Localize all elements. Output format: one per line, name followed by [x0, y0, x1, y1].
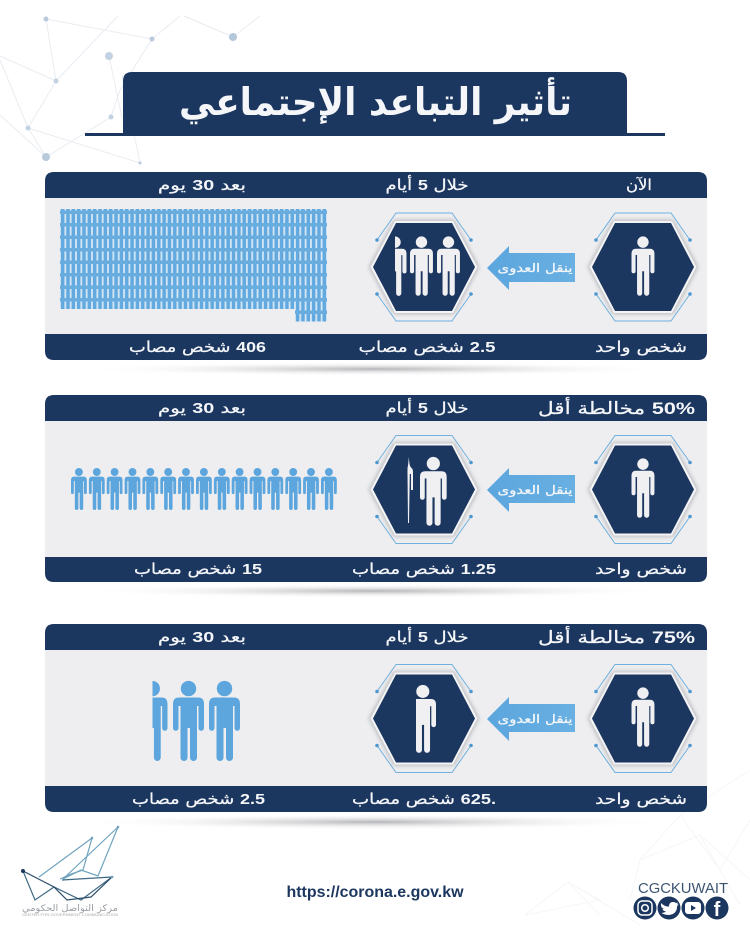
icon: one person hexagon — [588, 213, 698, 321]
panel: 50% less contact — [45, 395, 707, 582]
header bar — [45, 395, 707, 421]
label: one person: شخص واحد — [595, 560, 687, 578]
label: 406 infected: 406 شخص مصاب — [129, 338, 266, 356]
heading: now: الآن — [626, 176, 652, 194]
shadow under panel — [75, 584, 675, 598]
logo arabic name: مركز التواصل الحكومي — [22, 904, 118, 914]
panel body — [45, 395, 707, 582]
icon: 0.625 person hexagon — [369, 664, 479, 772]
chart: 2.5 people — [138, 681, 240, 761]
footer bar — [45, 334, 707, 360]
shadow under panel — [75, 362, 675, 376]
footer bar — [45, 557, 707, 582]
shadow under panel — [75, 814, 675, 830]
header bar — [45, 172, 707, 198]
arrow: transmits infection — [487, 468, 575, 512]
heading: within 5 days: خلال 5 أيام — [386, 175, 468, 194]
heading: after 30 days: بعد 30 يوم — [158, 176, 246, 194]
panel body — [45, 624, 707, 812]
title banner — [85, 72, 665, 136]
label: 1.25 infected: 1.25 شخص مصاب — [352, 560, 496, 578]
label: 2.5 infected: 2.5 شخص مصاب — [358, 338, 496, 356]
icon: one person hexagon — [588, 436, 698, 544]
social handle: CGCKUWAIT — [638, 880, 728, 897]
logo english name: CENTER FOR GOVERNMENT COMMUNICATION — [22, 912, 118, 917]
background network bottom-right — [525, 770, 750, 925]
panel: 75% less contact — [45, 624, 707, 812]
icon: 1.25 people hexagon — [369, 436, 479, 544]
title background — [123, 72, 627, 135]
icon: youtube — [682, 896, 704, 920]
icon: 2.5 people hexagon — [369, 213, 479, 321]
chart: 15 people row — [71, 468, 337, 510]
footer bar — [45, 786, 707, 812]
label: one person: شخص واحد — [595, 790, 687, 808]
label: 15 infected: 15 شخص مصاب — [134, 560, 262, 578]
arrow: transmits infection: ينقل العدوى — [498, 712, 572, 727]
panel: now, baseline scenario — [45, 172, 707, 360]
heading: after 30 days: بعد 30 يوم — [158, 399, 246, 417]
heading: within 5 days: خلال 5 أيام — [386, 627, 468, 646]
social icons — [634, 896, 728, 921]
heading: within 5 days: خلال 5 أيام — [386, 398, 468, 417]
icon: twitter — [658, 896, 680, 920]
heading: 75% less contact: 75% مخالطة أقل — [538, 626, 695, 648]
icon: facebook: f — [714, 899, 721, 921]
panel body — [45, 172, 707, 360]
header bar — [45, 624, 707, 650]
website url: https://corona.e.gov.kw — [286, 884, 464, 901]
title text: تأثير التباعد الإجتماعي — [179, 77, 572, 124]
logo: center for government communication — [21, 826, 119, 917]
title baseline — [85, 133, 665, 136]
icon: one person hexagon — [588, 664, 698, 772]
logo mark — [21, 826, 119, 900]
heading: after 30 days: بعد 30 يوم — [158, 628, 246, 646]
chart: 406 people grid — [60, 209, 327, 322]
label: one person: شخص واحد — [595, 338, 687, 356]
arrow: transmits infection — [487, 697, 575, 741]
label: .625 infected: .625 شخص مصاب — [352, 790, 496, 808]
label: 2.5 infected: 2.5 شخص مصاب — [132, 790, 265, 808]
background network top-left — [0, 16, 260, 164]
arrow: transmits infection — [487, 246, 575, 290]
arrow: transmits infection: ينقل العدوى — [498, 261, 572, 276]
heading: 50% less contact: 50% مخالطة أقل — [538, 397, 695, 419]
arrow: transmits infection: ينقل العدوى — [498, 483, 572, 498]
icon: instagram — [634, 896, 656, 920]
